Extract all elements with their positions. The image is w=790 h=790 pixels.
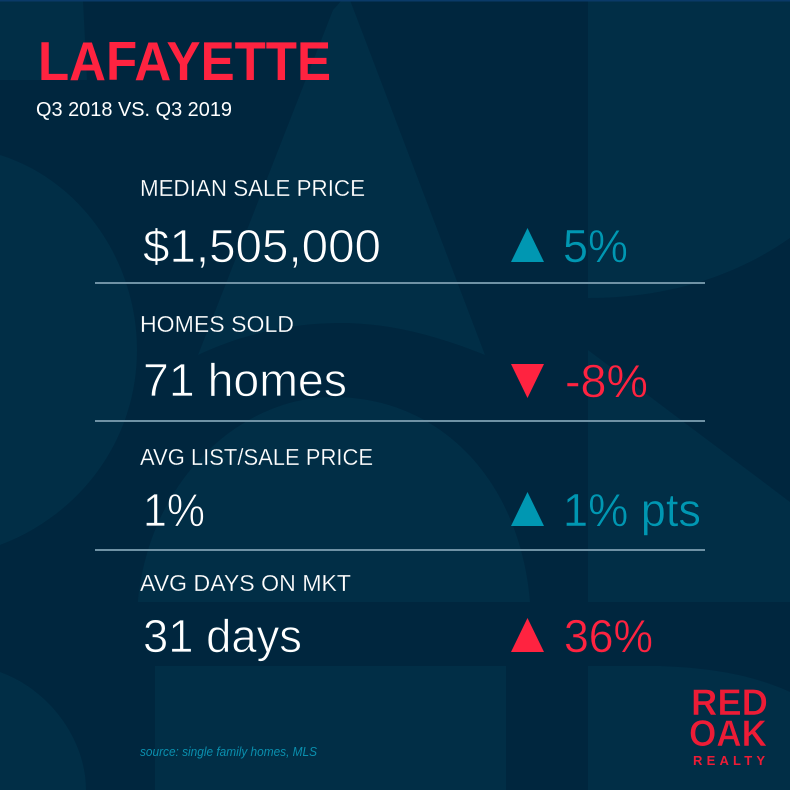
value: average list/sale price: 1% [143, 484, 205, 536]
change: 5%: 5% [563, 220, 628, 272]
subtitle: Q3 2018 VS. Q3 2019 [36, 99, 232, 121]
label: homes sold: HOMES SOLD [140, 311, 294, 337]
value: average days on market: 31 days [143, 610, 302, 662]
label: average days on market: AVG DAYS ON MKT [140, 570, 351, 596]
icon: teal up arrow [511, 228, 544, 262]
logo: Red Oak Realty: OAK [689, 713, 767, 754]
label: median sale price: MEDIAN SALE PRICE [140, 175, 365, 201]
panel: homes sold [140, 311, 648, 407]
icon: red down arrow [511, 364, 544, 398]
title: LAFAYETTE [38, 30, 331, 92]
value: homes sold: 71 homes [143, 354, 347, 406]
panel: median sale price [140, 175, 628, 272]
panel: average days on market [140, 570, 653, 662]
label: average list/sale price: AVG LIST/SALE PRICE [140, 444, 373, 470]
logo: Red Oak Realty: REALTY [693, 753, 769, 768]
icon: teal up arrow [511, 492, 544, 526]
change: 1% pts: 1% pts [563, 484, 701, 536]
panel: average list/sale price [140, 444, 701, 536]
icon: red up arrow [511, 618, 544, 652]
value: median sale price: $1,505,000 [143, 220, 381, 272]
change: -8%: -8% [565, 355, 648, 407]
source note: source: single family homes, MLS [140, 745, 318, 759]
logo: Red Oak Realty: RED [691, 682, 768, 723]
change: 36%: 36% [564, 610, 653, 662]
logo: Red Oak Realty [689, 682, 769, 768]
